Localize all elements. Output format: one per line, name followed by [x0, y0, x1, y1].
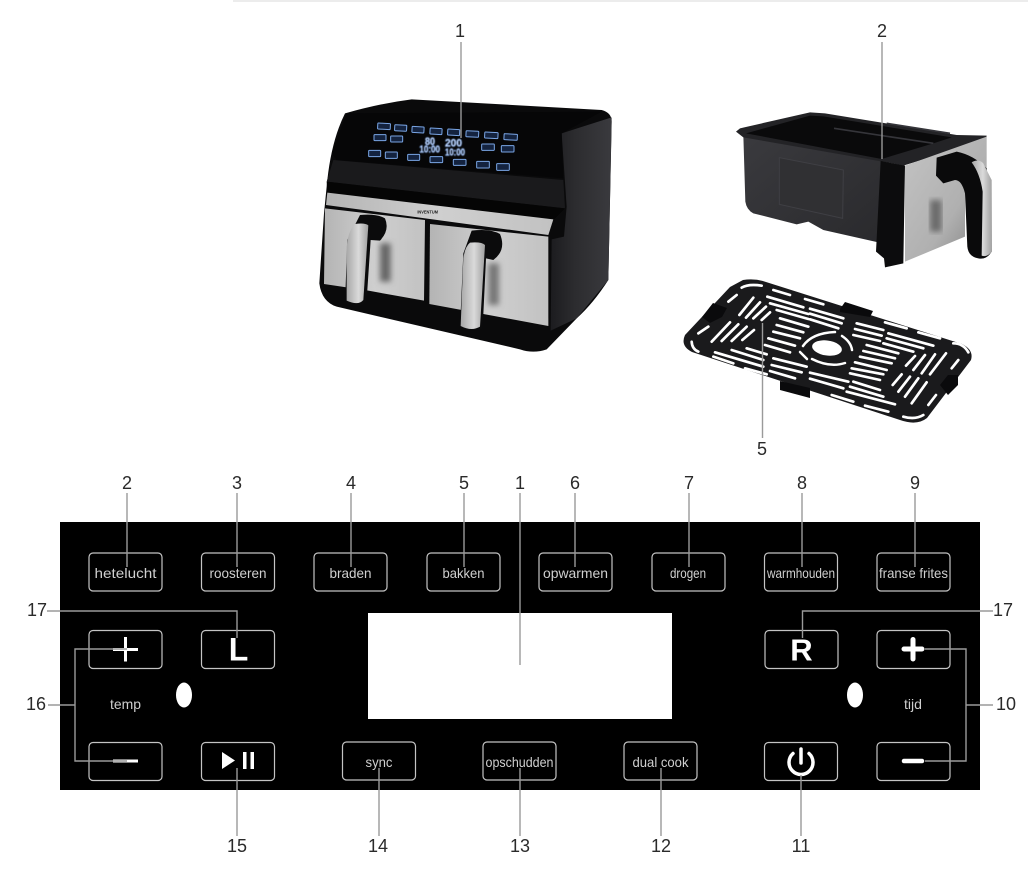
- air fryer photo illustration: [319, 99, 612, 352]
- grate slots left half: [692, 285, 823, 378]
- callout 15: 15: [227, 836, 247, 856]
- button hetelucht: [89, 553, 162, 591]
- crisper grate: [684, 279, 972, 423]
- button start pause: [202, 742, 274, 780]
- panel background: [60, 522, 980, 790]
- photo callout 5: [757, 323, 767, 459]
- button franse frites: franse frites: [879, 565, 948, 581]
- button sync: [342, 742, 416, 780]
- button time plus: [877, 630, 950, 668]
- label temp: temp: [110, 696, 141, 712]
- button hetelucht: hetelucht: [94, 565, 157, 581]
- left handle: [345, 215, 387, 307]
- fryer body: [319, 99, 612, 352]
- basket photo illustration: [736, 112, 992, 267]
- button sync: sync: [366, 754, 392, 770]
- right handle: [460, 230, 502, 331]
- button bakken: bakken: [442, 565, 484, 581]
- button R: [765, 630, 838, 668]
- callout 7: 7: [684, 473, 694, 493]
- drawer slot: [327, 182, 565, 220]
- basket body: [743, 135, 882, 252]
- callout 4: 4: [346, 473, 356, 493]
- button temp plus: [89, 630, 162, 668]
- photo callout 2: [877, 21, 887, 159]
- button drogen: [652, 553, 725, 591]
- basket panel recess: [779, 158, 843, 218]
- grate clips: [702, 302, 958, 398]
- button time minus: [877, 742, 950, 780]
- button L: L: [229, 632, 248, 668]
- photo callout 1: [455, 21, 465, 138]
- hood lower sheen: [327, 160, 565, 208]
- right drawer front: [429, 224, 548, 326]
- mini display digits: 80: [425, 136, 435, 148]
- indicator left: [176, 682, 192, 708]
- callout 11: [792, 775, 810, 856]
- callout 3: 3: [232, 473, 242, 493]
- photo callout 5: 5: [757, 439, 767, 459]
- callout 11: 11: [792, 836, 810, 856]
- display window: [368, 613, 672, 719]
- grate slots right half: [810, 309, 968, 418]
- callout 17 right: 17: [993, 600, 1013, 620]
- callout 12: 12: [651, 836, 671, 856]
- button franse frites: [877, 553, 950, 591]
- basket inner rails: [834, 123, 950, 143]
- callout 16: [26, 649, 127, 761]
- brand text: INVENTUM: [417, 210, 438, 215]
- grate plate: [684, 279, 972, 423]
- left drawer front: [324, 208, 425, 301]
- callout 4: [346, 473, 356, 567]
- mini display digits: 10:00: [419, 145, 440, 156]
- basket handle: [936, 152, 992, 259]
- basket steel front: [905, 137, 987, 262]
- button roosteren: [202, 553, 274, 591]
- callout 9: [910, 473, 920, 567]
- callout 2: [122, 473, 132, 567]
- callout 16: 16: [26, 694, 46, 714]
- callout 6: 6: [570, 473, 580, 493]
- callout 6: [570, 473, 580, 567]
- callout 15: [227, 768, 247, 856]
- button power: [764, 742, 838, 780]
- callout 8: [797, 473, 807, 567]
- control panel glass: [332, 112, 602, 178]
- mini display digits: 10:00: [445, 147, 465, 158]
- indicator right: [847, 682, 863, 708]
- button dual cook: [624, 742, 697, 780]
- callout 1: 1: [515, 473, 525, 493]
- button braden: [314, 553, 387, 591]
- callout 2: 2: [122, 473, 132, 493]
- button drogen: drogen: [670, 565, 706, 581]
- button bakken: [427, 553, 500, 591]
- button opschudden: [483, 742, 556, 780]
- callout 7: [684, 473, 694, 567]
- callout 14: 14: [368, 836, 388, 856]
- button opwarmen: [539, 553, 612, 591]
- callout 13: 13: [510, 836, 530, 856]
- front steel strip: [326, 193, 553, 235]
- button R: R: [790, 632, 813, 668]
- button temp minus: [89, 742, 162, 780]
- button opschudden: opschudden: [486, 754, 554, 770]
- button braden: braden: [330, 565, 372, 581]
- basket rim: [736, 112, 987, 166]
- button dual cook: dual cook: [632, 754, 689, 770]
- fryer right side: [551, 117, 612, 331]
- callout 14: [368, 768, 388, 856]
- mini display digits: 200: [445, 138, 462, 150]
- callout 13: [510, 768, 530, 856]
- drawer shadows: [380, 243, 499, 305]
- basket interior: [746, 116, 952, 159]
- button warmhouden: [764, 553, 838, 591]
- button opwarmen: opwarmen: [543, 565, 608, 581]
- basket dark end: [876, 161, 905, 267]
- callout 8: 8: [797, 473, 807, 493]
- callout 3: [232, 473, 242, 567]
- button L: [202, 630, 274, 668]
- callout 9: 9: [910, 473, 920, 493]
- button warmhouden: warmhouden: [766, 565, 835, 581]
- mini control panel buttons: [369, 123, 517, 170]
- callout 10: [925, 649, 1016, 761]
- callout 5: [459, 473, 469, 567]
- callout 17 right: [802, 600, 1013, 638]
- button roosteren: roosteren: [210, 565, 266, 581]
- callout 17 left: 17: [27, 600, 47, 620]
- callout 12: [651, 768, 671, 856]
- photo callout 1: 1: [455, 21, 465, 41]
- label tijd: tijd: [904, 696, 922, 712]
- callout 17 left: [27, 600, 237, 638]
- mini display digits: [419, 136, 465, 158]
- control panel: [60, 522, 980, 790]
- grate center hub: [800, 332, 852, 365]
- callout 10: 10: [996, 694, 1016, 714]
- photo callout 2: 2: [877, 21, 887, 41]
- top edge strip: [233, 0, 1028, 2]
- callout 5: 5: [459, 473, 469, 493]
